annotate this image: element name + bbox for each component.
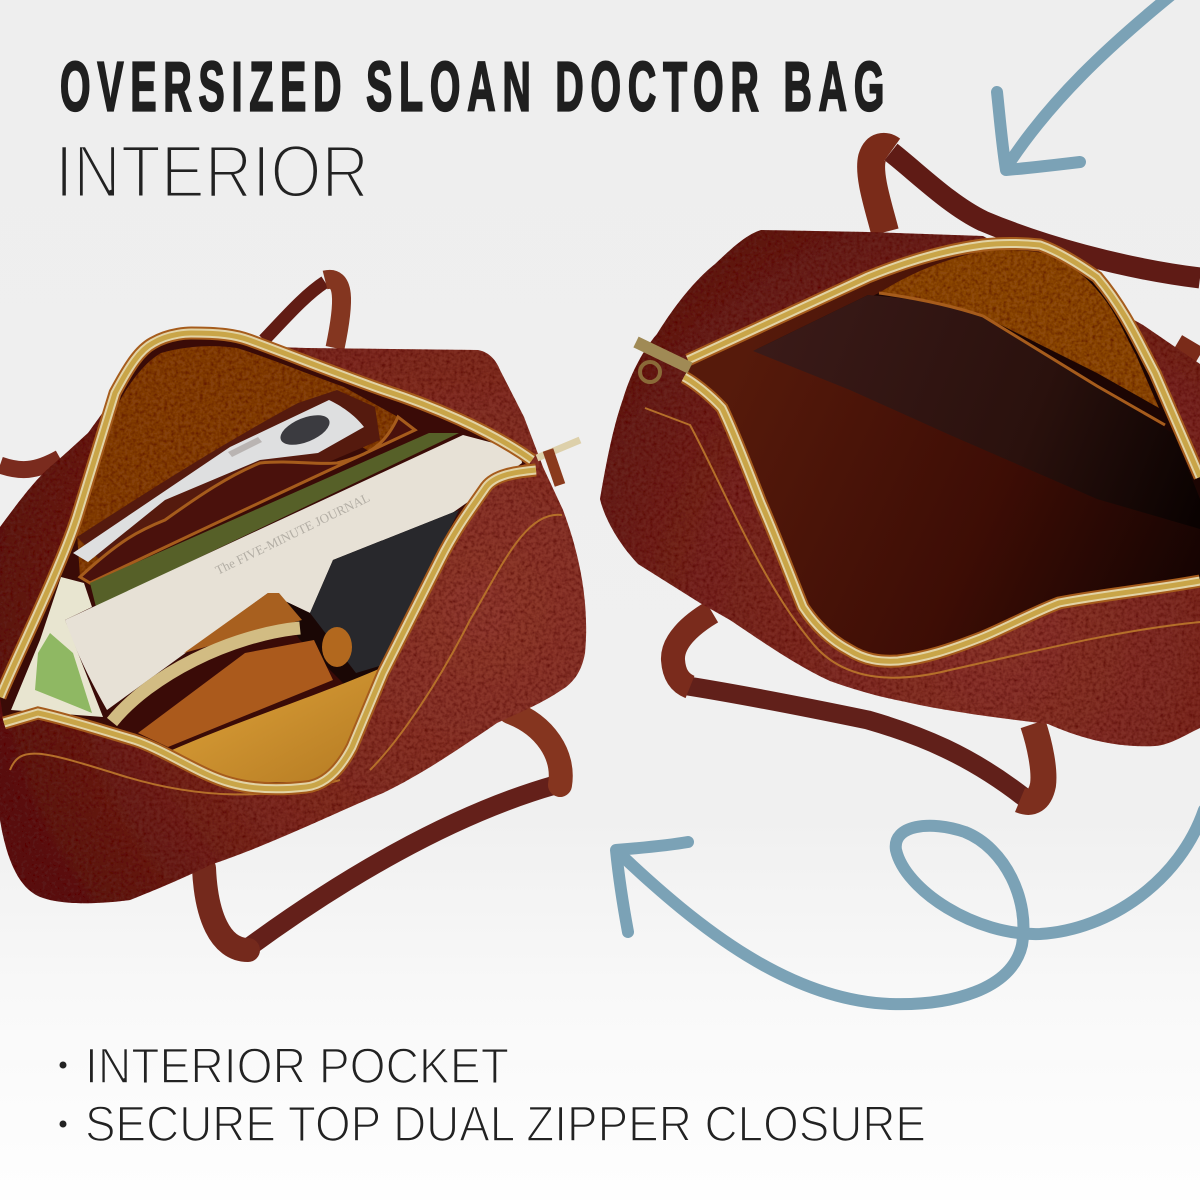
arrow: top right xyxy=(997,0,1170,170)
bullet one: INTERIOR POCKET xyxy=(85,1038,509,1094)
dark space behind pocket xyxy=(753,277,1200,499)
front pocket xyxy=(80,417,415,583)
zipper pull xyxy=(636,342,690,382)
interior opening base xyxy=(0,333,532,789)
interior pocket xyxy=(753,295,1200,529)
far handle xyxy=(871,147,1200,278)
stitching xyxy=(645,408,1200,678)
camera xyxy=(310,510,459,673)
pocket edge xyxy=(879,293,1165,425)
floral scarf xyxy=(11,577,103,717)
interior floor xyxy=(684,244,1200,661)
dark gap behind camera xyxy=(268,510,459,690)
near handle xyxy=(673,612,1043,802)
title: OVERSIZED SLOAN DOCTOR BAG xyxy=(60,49,884,127)
pouch tab xyxy=(322,627,352,667)
arrow: bottom looping xyxy=(616,810,1200,1004)
top zipper xyxy=(0,333,532,697)
bullet list xyxy=(60,1038,926,1152)
suede back panel xyxy=(879,250,1159,408)
pouch zipper xyxy=(112,628,300,722)
phone xyxy=(73,400,364,562)
stitching xyxy=(10,515,562,794)
phone cameras xyxy=(276,409,334,451)
book title: The FIVE-MINUTE JOURNAL xyxy=(213,490,372,578)
far side handle stub xyxy=(1178,342,1200,355)
zipper pull xyxy=(537,440,580,485)
photo: right bag empty interior xyxy=(600,147,1200,802)
leather body xyxy=(0,343,586,903)
lower zipper xyxy=(4,470,536,789)
left handle stub xyxy=(0,458,60,470)
far handle xyxy=(264,279,342,348)
green notebook xyxy=(90,433,459,607)
cream book xyxy=(65,435,522,710)
dark leather strip behind phone xyxy=(77,390,380,560)
photo: left bag with contents xyxy=(0,279,586,950)
yellow wallet xyxy=(172,667,383,782)
tan pouch xyxy=(112,593,352,747)
lower zipper xyxy=(684,377,1200,661)
leather body xyxy=(600,230,1200,746)
near handle xyxy=(204,712,561,950)
suede back panel xyxy=(77,346,398,577)
bullet two: SECURE TOP DUAL ZIPPER CLOSURE xyxy=(85,1096,926,1152)
top zipper xyxy=(688,244,1200,477)
subtitle: INTERIOR xyxy=(55,130,369,213)
